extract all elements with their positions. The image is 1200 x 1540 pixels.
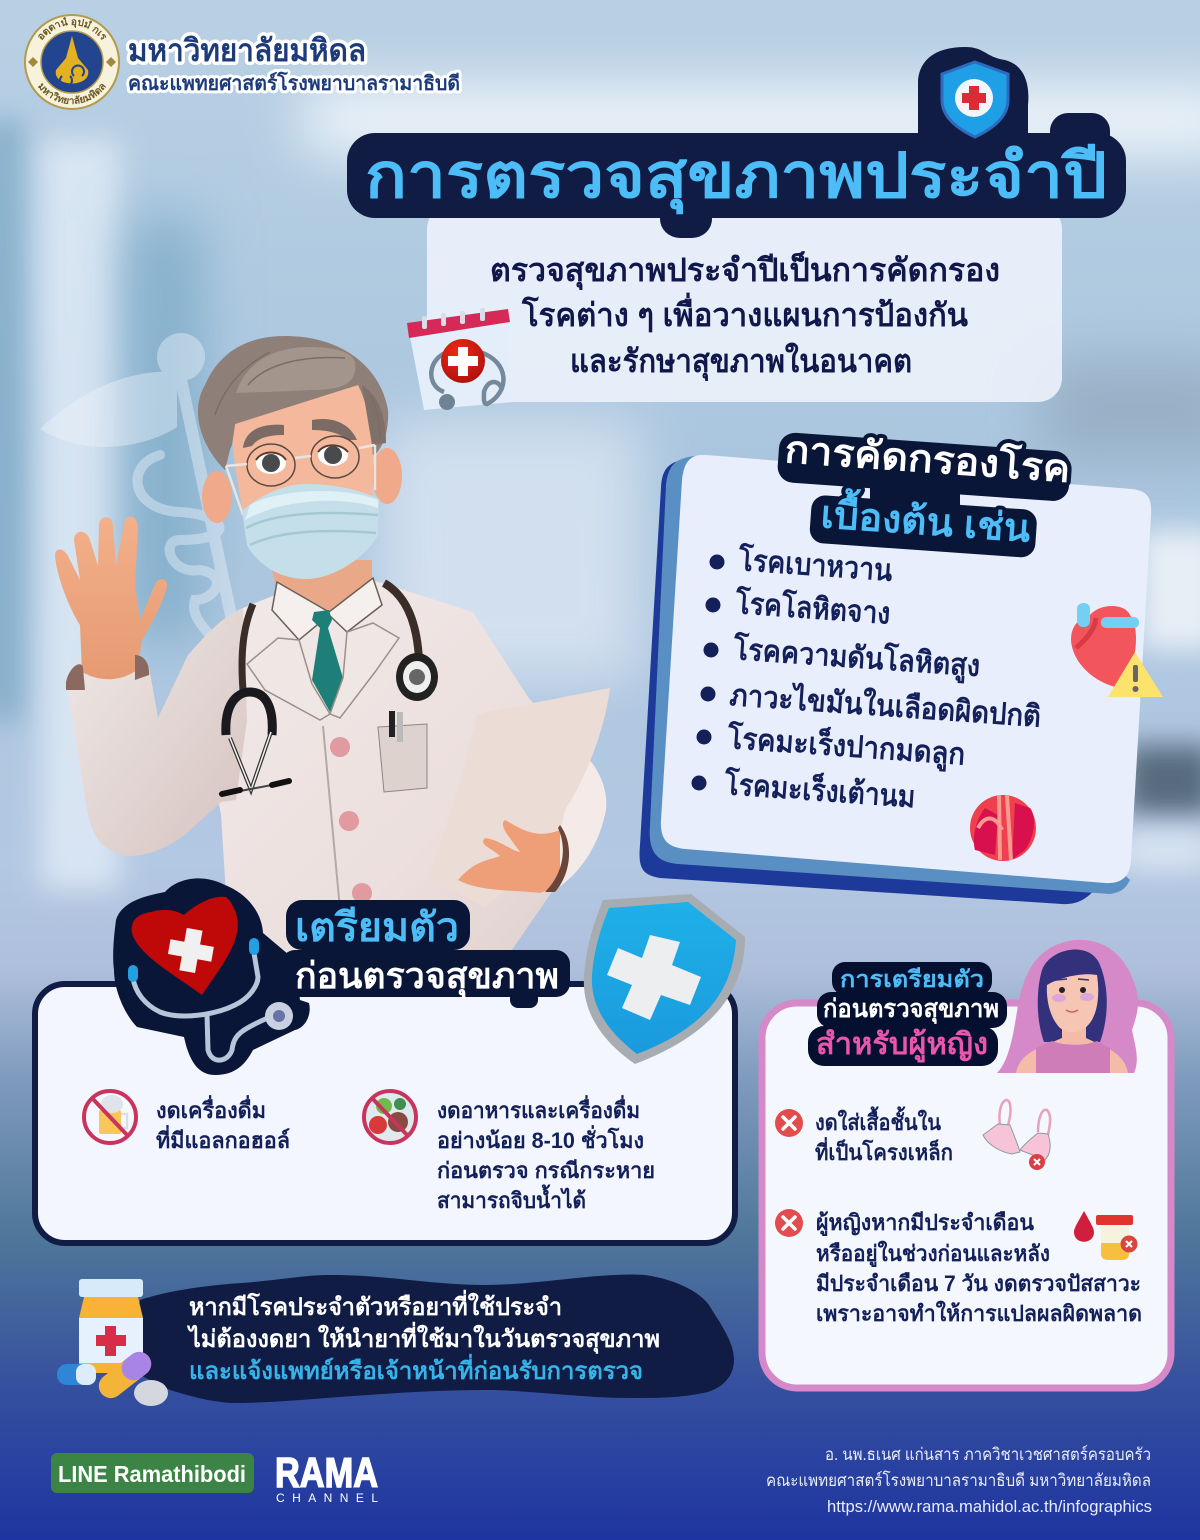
item: menstruation (775, 1209, 1142, 1326)
callout: medication: หากมีโรคประจำตัวหรือยาที่ใช้ประจำ (189, 1289, 562, 1321)
button: LINE Ramathibodi (51, 1453, 254, 1493)
item: no alcohol: งดเครื่องดื่ม (156, 1094, 266, 1123)
item: menstruation: เพราะอาจทำให้การแปลผลผิดพลาด (816, 1300, 1142, 1326)
woman portrait (997, 940, 1138, 1073)
logo: Mahidol University seal (24, 14, 120, 110)
item: menstruation: ผู้หญิงหากมีประจำเดือน (816, 1210, 1034, 1237)
credits: อ. นพ.ธเนศ แก่นสาร ภาควิชาเวชศาสตร์ครอบครัว (825, 1445, 1151, 1464)
logo: RAMA CHANNEL: RAMA (275, 1449, 378, 1496)
doctor collar and lapels (272, 578, 382, 640)
doctor fringe (236, 347, 355, 393)
title (347, 47, 1126, 238)
item: no underwire: ที่เป็นโครงเหล็ก (815, 1136, 953, 1165)
screening list items: โรคมะเร็งเต้านม (723, 765, 917, 814)
doctor hair back (198, 336, 388, 470)
screening list items: โรคโลหิตจาง (734, 584, 892, 631)
item: fasting: อย่างน้อย 8-10 ชั่วโมง (437, 1124, 644, 1153)
callout: medication: ไม่ต้องงดยา ให้นำยาที่ใช้มาในวันตรวจสุขภาพ (186, 1321, 660, 1355)
icon: blood drop and urine cup (1074, 1211, 1138, 1260)
panel: women preparation (762, 940, 1171, 1388)
background caduceus watermark (40, 333, 232, 640)
doctor ears (202, 471, 232, 523)
women panel heading (808, 962, 1007, 1066)
item: fasting: งดอาหารและเครื่องดื่ม (437, 1094, 640, 1123)
subtitle card (427, 205, 1062, 402)
doctor raised hand (55, 516, 167, 679)
screening heading: การคัดกรองโรค (783, 426, 1072, 491)
item: no underwire (775, 1100, 1050, 1170)
screening heading: เบื้องต้น เช่น (819, 486, 1032, 551)
preparation heading (281, 900, 570, 1008)
logo: RAMA CHANNEL: CHANNEL (276, 1491, 378, 1505)
item: menstruation: มีประจำเดือน 7 วัน งดตรวจปัสสาวะ (816, 1271, 1141, 1296)
preparation heading: ก่อนตรวจสุขภาพ (295, 955, 559, 999)
doctor buttons (330, 737, 372, 903)
item: no alcohol: ที่มีแอลกอฮอล์ (156, 1124, 290, 1153)
doctor holding hand (458, 820, 560, 893)
panel: preparation (35, 878, 745, 1243)
logo: Mahidol University seal: อตฺตานํ อุปมํ กเร (38, 17, 106, 40)
item: no underwire: งดใส่เสื้อชั้นใน (815, 1106, 941, 1135)
icon: heart with warning (1071, 603, 1163, 697)
doctor pocket (378, 724, 427, 792)
screening list items: โรคความดันโลหิตสูง (731, 630, 981, 685)
doctor mask (242, 484, 379, 579)
item: fasting (364, 1091, 655, 1213)
item: fasting: สามารถจิบน้ำได้ (437, 1184, 586, 1213)
item: fasting: ก่อนตรวจ กรณีกระหาย (437, 1158, 655, 1183)
women panel heading: ก่อนตรวจสุขภาพ (823, 995, 999, 1025)
subtitle card: ตรวจสุขภาพประจำปีเป็นการคัดกรอง (490, 250, 1000, 291)
heart stethoscope icon (113, 878, 310, 1075)
item: no alcohol (84, 1091, 290, 1153)
credits (766, 1445, 1152, 1516)
preparation heading: เตรียมตัว (295, 906, 459, 950)
shield badge above title (942, 62, 1008, 137)
logo: Mahidol University seal: มหาวิทยาลัยมหิดล (38, 83, 106, 104)
doctor coat body (200, 579, 600, 990)
callout: medication: และแจ้งแพทย์หรือเจ้าหน้าที่ก่อนรับการตรวจ (189, 1353, 643, 1385)
doctor right sleeve (530, 755, 606, 890)
button: LINE Ramathibodi: LINE Ramathibodi (58, 1461, 246, 1487)
icon: cervical anatomy (970, 795, 1036, 861)
credits: https://www.rama.mahidol.ac.th/infographics (827, 1497, 1152, 1516)
screening heading (777, 426, 1072, 558)
item: menstruation: หรืออยู่ในช่วงก่อนและหลัง (816, 1240, 1050, 1268)
screening list items (692, 541, 1042, 814)
doctor clipboard (428, 688, 610, 907)
screening list items: โรคมะเร็งปากมดลูก (725, 719, 966, 774)
doctor neck (270, 560, 372, 618)
screening card back layers (640, 460, 1096, 904)
subtitle card: และรักษาสุขภาพในอนาคต (570, 342, 912, 382)
callout: medication (57, 1275, 734, 1406)
screening list items: โรคเบาหวาน (737, 541, 894, 588)
icon: medicine bottle and pills (57, 1279, 168, 1406)
subtitle card: โรคต่าง ๆ เพื่อวางแผนการป้องกัน (521, 292, 968, 333)
women panel heading: การเตรียมตัว (840, 966, 984, 992)
title: การตรวจสุขภาพประจำปี (365, 142, 1107, 214)
organisation name: มหาวิทยาลัยมหิดล (128, 33, 366, 68)
doctor cuff opening (66, 655, 149, 690)
doctor character (55, 336, 610, 990)
organisation name (128, 33, 460, 95)
doctor raised arm sleeve (66, 608, 247, 856)
panel: screening list (640, 426, 1163, 904)
organisation name: คณะแพทยศาสตร์โรงพยาบาลรามาธิบดี (128, 71, 460, 95)
credits: คณะแพทยศาสตร์โรงพยาบาลรามาธิบดี มหาวิทยาลัยมหิดล (766, 1470, 1151, 1490)
women panel heading: สำหรับผู้หญิง (816, 1028, 988, 1063)
doctor face (232, 385, 373, 520)
icon: bra (983, 1100, 1050, 1170)
icon: calendar with stethoscope (407, 308, 513, 410)
doctor stethoscope (242, 604, 253, 690)
doctor glasses (247, 436, 359, 486)
shield with cross (584, 894, 745, 1064)
screening list items: ภาวะไขมันในเลือดผิดปกติ (729, 677, 1042, 734)
doctor brows and eyes (243, 425, 284, 448)
